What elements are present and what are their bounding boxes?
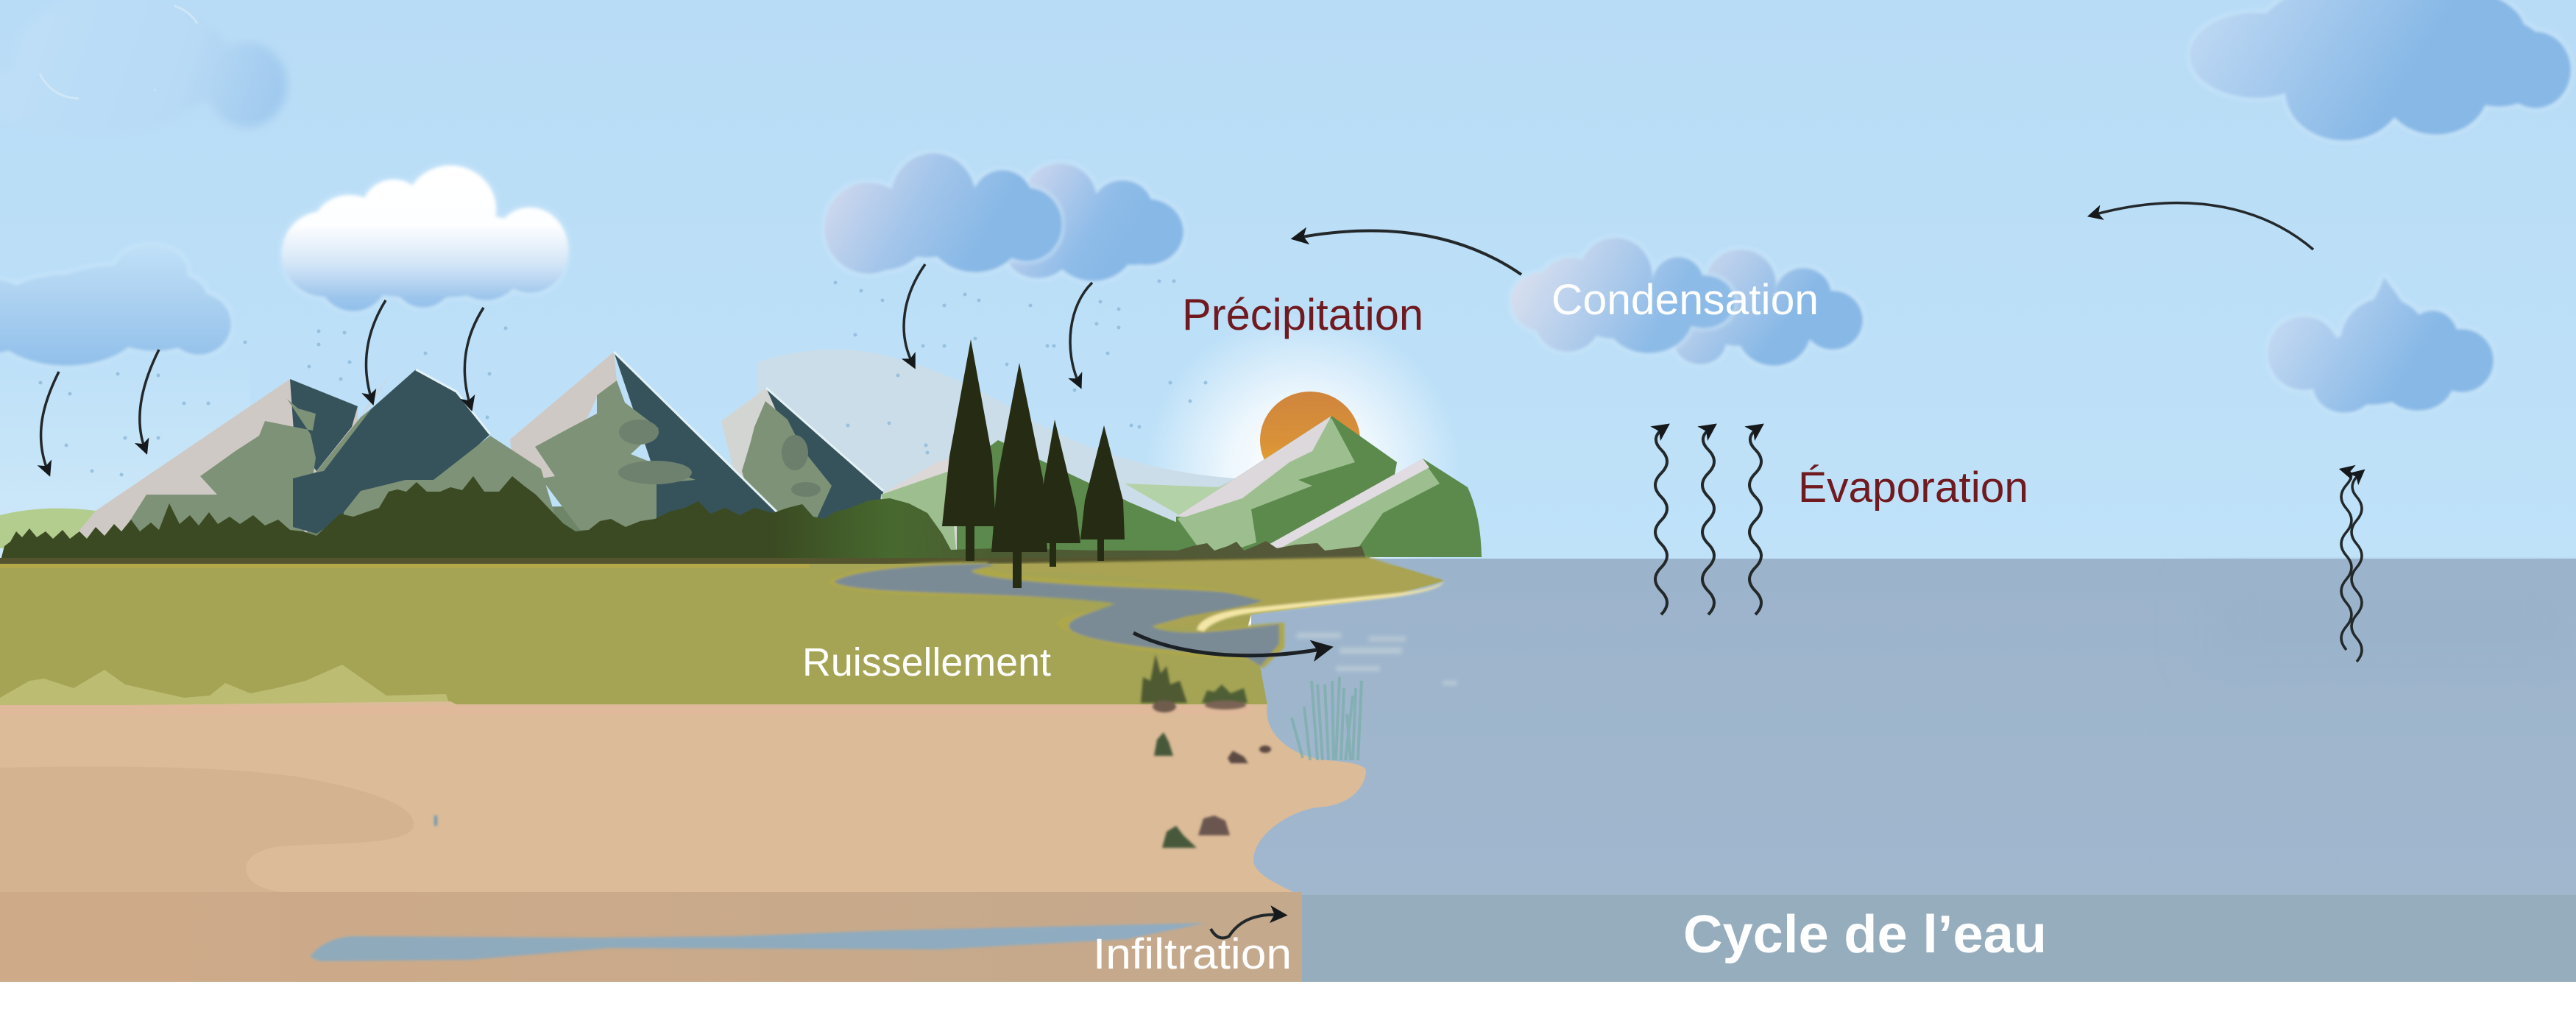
water ripples bbox=[1297, 633, 1457, 685]
sun with glow bbox=[1144, 313, 1461, 629]
label: Condensation: Condensation bbox=[1551, 276, 1819, 324]
mountain A bbox=[1176, 416, 1397, 559]
reeds in water bbox=[1292, 677, 1362, 760]
tree 3 bbox=[1034, 420, 1080, 567]
arrows: evaporation waves bbox=[1655, 428, 1761, 615]
arrow: runoff bbox=[1133, 633, 1325, 656]
forest treeline bbox=[0, 476, 1367, 563]
cloud: precipitation pair bbox=[824, 153, 1183, 281]
sea depth shading right bbox=[2208, 581, 2576, 662]
river bbox=[828, 562, 1284, 668]
light hills on grass bbox=[0, 665, 450, 710]
small tuft bbox=[1202, 684, 1248, 703]
rocks bbox=[1228, 751, 1248, 763]
mountain 4 bbox=[721, 388, 883, 526]
sand bbox=[0, 701, 1366, 896]
right part bbox=[1005, 163, 1183, 281]
mountain B bbox=[1266, 459, 1482, 559]
rain drops bbox=[38, 280, 1207, 477]
arrow: condensation to precipitation bbox=[1298, 231, 1521, 275]
right part bbox=[1674, 250, 1863, 366]
cloud: faint top left bbox=[0, 0, 287, 136]
mountain 2 bbox=[293, 369, 559, 534]
sea bbox=[1251, 559, 2576, 897]
label: Évaporation: Évaporation bbox=[1798, 464, 2028, 512]
grass tufts and rocks bbox=[434, 654, 1271, 848]
olive grass land bbox=[0, 563, 1444, 711]
left part bbox=[824, 153, 1062, 274]
aquifer bbox=[310, 923, 1206, 961]
cloud: top right bbox=[2190, 0, 2571, 141]
mountain 1 bbox=[74, 379, 358, 537]
left part bbox=[1511, 238, 1735, 353]
lower soil band bbox=[0, 892, 1302, 982]
cloud: left bbox=[0, 245, 231, 366]
grass top edge bbox=[0, 558, 1367, 564]
mountain base fill bbox=[96, 500, 883, 559]
tree 4 bbox=[1080, 425, 1125, 561]
label: Ruissellement: Ruissellement bbox=[802, 640, 1051, 684]
darker sand dune bbox=[0, 767, 414, 892]
pale green hill far left bbox=[0, 509, 103, 548]
cloud: faint top left detail bbox=[40, 6, 197, 99]
arrows: right evaporation waves bbox=[2341, 470, 2362, 662]
tree 2 bbox=[991, 363, 1047, 588]
title: Cycle de l’eau bbox=[1683, 905, 2047, 964]
arrow: right cloud drift bbox=[2093, 203, 2313, 250]
arrow: infiltration bbox=[1211, 915, 1281, 938]
right green mountains bbox=[1176, 416, 1482, 559]
mountains: left range bbox=[74, 352, 883, 559]
mountain 3 bbox=[510, 352, 777, 530]
trees bbox=[942, 339, 1125, 588]
sky background bbox=[0, 0, 2576, 563]
peninsula and beach highlight bbox=[990, 557, 1444, 631]
tall tuft bbox=[1141, 654, 1187, 703]
cloud: right small bbox=[2268, 277, 2494, 413]
grass highlight strip bbox=[0, 564, 810, 568]
tree 1 bbox=[942, 339, 996, 561]
cloud: white bbox=[282, 166, 568, 311]
sand upper stripe bbox=[0, 705, 1251, 714]
label: Précipitation: Précipitation bbox=[1182, 290, 1423, 339]
cloud: condensation pair bbox=[1511, 238, 1863, 366]
sea lower band bbox=[1302, 895, 2576, 982]
green mountains behind trees bbox=[876, 440, 1251, 559]
arrows: rain arrows bbox=[41, 264, 1092, 471]
lower tuft bbox=[1154, 732, 1173, 756]
label: Infiltration: Infiltration bbox=[1093, 930, 1292, 978]
pale distant hill bbox=[758, 350, 1236, 559]
